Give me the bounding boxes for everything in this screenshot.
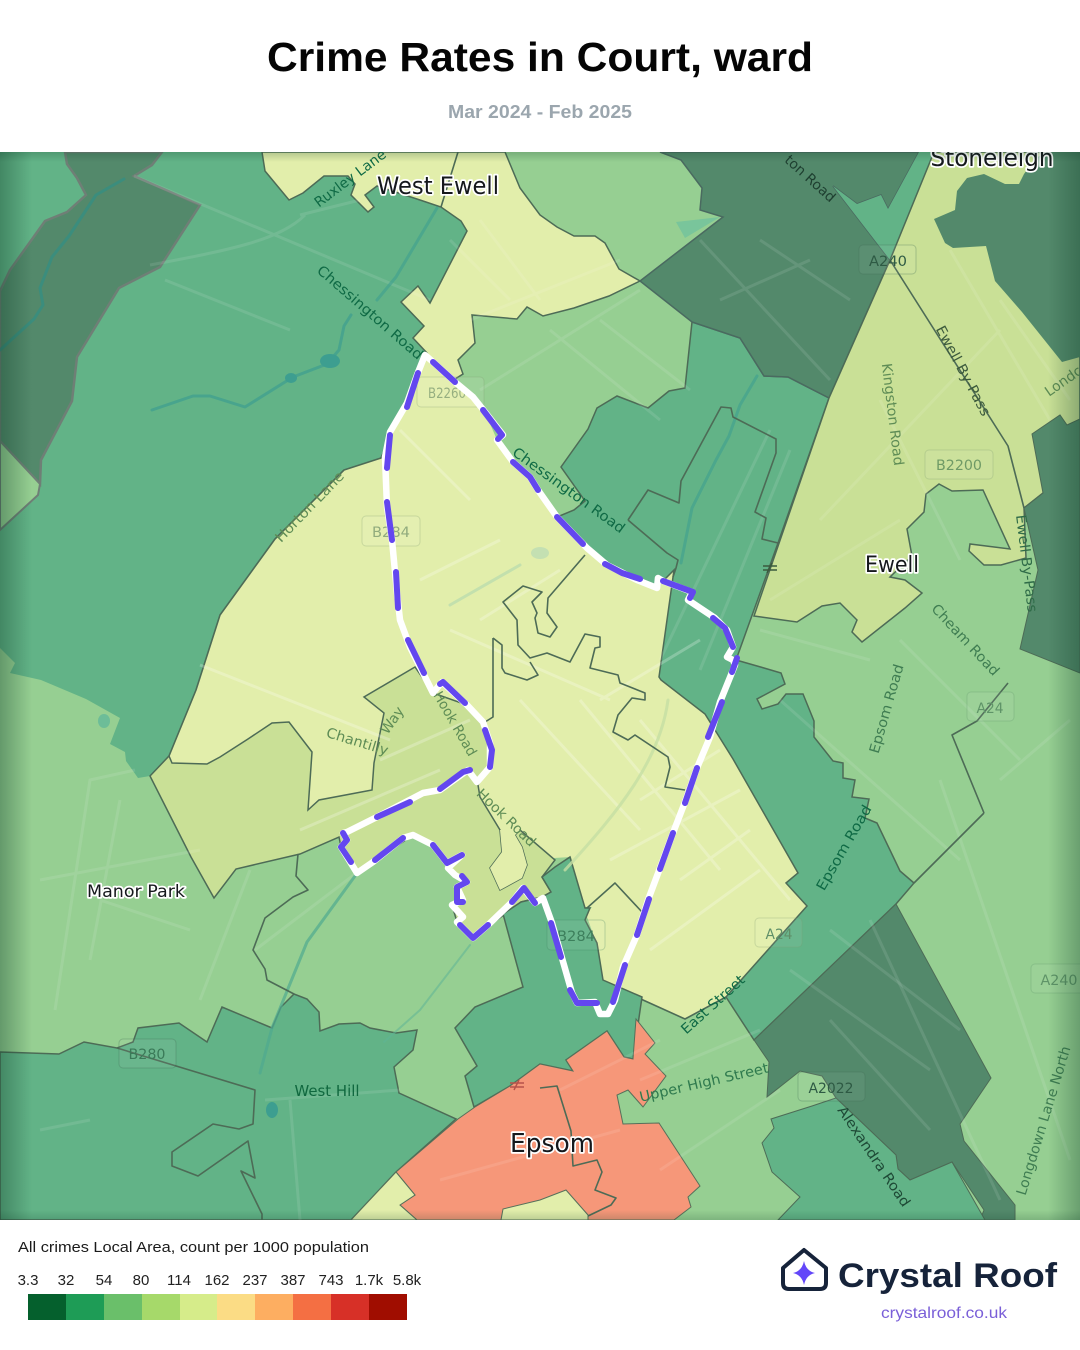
sign: A24 east	[967, 692, 1014, 721]
road labels: East Street	[678, 972, 749, 1038]
zone: light green neighbourhood	[150, 667, 555, 938]
road labels: Alexandra Road	[834, 1103, 913, 1210]
zone: Epsom town centre salmon	[396, 1019, 700, 1220]
legend tick labels: 32	[58, 1272, 74, 1289]
sign: B2260: B2260	[428, 386, 466, 402]
zone: ward and neighbouring yellow	[169, 353, 807, 1019]
road labels: Ewell By-Pass	[1012, 514, 1040, 613]
map	[0, 144, 1080, 1220]
place labels	[87, 144, 1054, 1159]
railway station icons	[510, 563, 777, 1090]
subtitle: date range: Mar 2024 - Feb 2025	[448, 102, 632, 122]
ward boundary: Court	[341, 355, 737, 1014]
road network	[40, 176, 1070, 1220]
sign: A24 south: A24	[766, 927, 792, 943]
sign: B2200: B2200	[936, 458, 982, 474]
road labels: Epsom Road	[814, 802, 875, 894]
place labels: West Ewell	[377, 172, 499, 200]
legend tick labels: 162	[204, 1272, 230, 1289]
zone: yellow pocket at Epsom bottom	[501, 1190, 588, 1220]
zone: north dark green	[640, 152, 919, 398]
zone: north-west dark strip	[0, 152, 200, 484]
logo: Crystal Roof	[783, 1250, 1058, 1322]
sign: B2200	[925, 450, 993, 479]
road labels: Chessington Road	[313, 263, 426, 363]
sign: A240 east	[1031, 964, 1080, 993]
sign: B284 north: B284	[372, 525, 410, 541]
sign: A24 east: A24	[976, 701, 1004, 717]
wordmark: Crystal Roof	[838, 1257, 1058, 1295]
place labels: Stoneleigh	[930, 144, 1054, 172]
legend tick labels: 80	[133, 1272, 149, 1289]
yellow zone outer edges	[168, 452, 726, 1020]
zone: central B284 green	[455, 857, 642, 1107]
zone: yellow pocket beside Hook Road	[490, 830, 527, 890]
legend tick labels: 743	[318, 1272, 344, 1289]
road labels: Ruxley Lane	[312, 147, 389, 211]
zone: small green patch by A240	[833, 152, 934, 260]
road labels: Horton Lane	[272, 469, 348, 546]
legend tick labels: 3.3	[18, 1272, 38, 1289]
legend tick labels: 54	[96, 1272, 112, 1289]
zone: east dark green	[1020, 415, 1080, 673]
sign: A240 north	[859, 245, 916, 274]
legend tick labels	[18, 1272, 422, 1289]
sign: B280: B280	[128, 1047, 166, 1063]
zone: yellow pockets south of Epsom	[351, 1172, 417, 1220]
road labels: ton Road	[781, 152, 838, 206]
zone: south-east dark green	[754, 904, 1015, 1220]
place labels: Epsom	[510, 1129, 594, 1159]
zone: Ewell light green	[754, 152, 1080, 642]
sign: B284 south	[547, 920, 605, 950]
sign: B284 north	[362, 516, 420, 546]
zone: central-north green	[557, 322, 914, 1040]
road labels: Kingston Road	[878, 362, 906, 467]
map edge vignette	[0, 152, 1080, 1220]
zone: far-west pale wedge	[0, 441, 40, 530]
road labels: Upper High Street	[638, 1060, 771, 1106]
road labels: Ewell By-Pass	[932, 323, 993, 419]
sign: B2260	[417, 377, 484, 407]
road labels: Way	[378, 704, 408, 738]
road labels: Cheam Road	[928, 601, 1002, 679]
sign: A240 north: A240	[869, 254, 907, 270]
zone: West Hill green	[0, 994, 456, 1220]
icon: house with star	[783, 1250, 826, 1289]
legend tick labels: 387	[280, 1272, 306, 1289]
sign: B280	[119, 1039, 176, 1068]
road labels: West Hill	[294, 1082, 360, 1100]
zone: west green area	[0, 152, 467, 778]
sign: A240 east: A240	[1040, 973, 1078, 989]
title: Crime Rates in Court, ward	[267, 34, 813, 80]
legend tick labels: 1.7k	[355, 1272, 384, 1289]
ward internal boundaries	[117, 152, 1024, 1220]
road labels: Hook Road	[430, 689, 479, 759]
place labels: Ewell	[865, 553, 919, 578]
place labels: Manor Park	[87, 882, 185, 902]
zone: Stoneleigh dark green	[934, 152, 1080, 362]
road signs	[119, 245, 1080, 1101]
legend tick labels: 114	[167, 1272, 191, 1289]
road labels	[272, 147, 1080, 1210]
sign: B284 south: B284	[557, 929, 595, 945]
sign: A2022: A2022	[808, 1081, 854, 1097]
legend colour scale	[28, 1294, 407, 1320]
road labels: Hook Road	[473, 786, 539, 850]
road labels: Epsom Road	[867, 662, 908, 755]
rivers and ponds	[0, 179, 757, 1118]
website url: crystalroof.co.uk	[881, 1305, 1008, 1322]
sign: A2022	[798, 1072, 865, 1101]
legend title: All crimes Local Area, count per 1000 population	[18, 1239, 369, 1256]
legend tick labels: 5.8k	[393, 1272, 422, 1289]
zone: Alexandra Road green	[762, 1098, 985, 1220]
road labels: Longdown Lane North	[1014, 1044, 1074, 1197]
sign: A24 south	[755, 918, 802, 947]
zone: West Ewell yellow	[262, 152, 640, 379]
legend	[18, 1239, 422, 1320]
road labels: Chantilly	[324, 725, 390, 759]
road labels: Chessington Road	[509, 445, 628, 537]
legend tick labels: 237	[242, 1272, 268, 1289]
